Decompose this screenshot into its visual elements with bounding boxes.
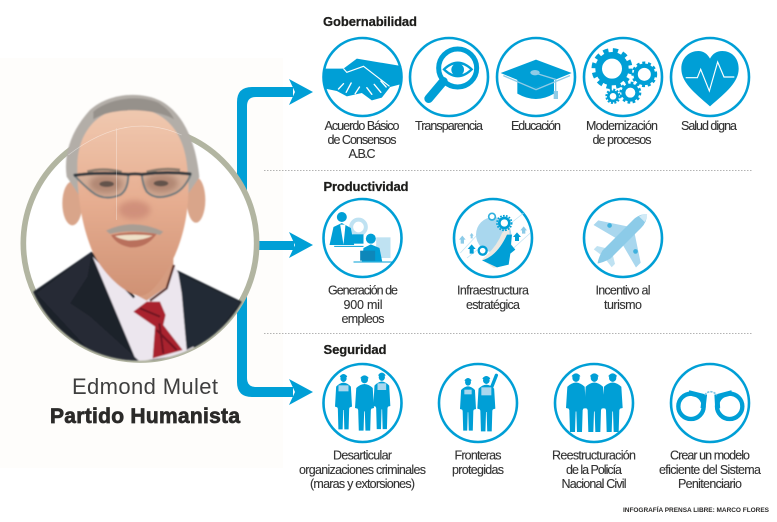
item: Generación de 900 mil empleos: 900 mil [344, 298, 382, 312]
item: Generación de 900 mil empleos [324, 199, 402, 326]
item: Educación: Educación [511, 119, 561, 133]
item: Transparencia [410, 38, 488, 133]
item: Infraestructura estratégica: estratégica [466, 298, 520, 312]
item: Modernización de procesos: Modernización [586, 119, 658, 133]
item: Transparencia: Transparencia [415, 119, 483, 133]
item: Acuerdo Básico de Consensos: de Consensos [328, 133, 396, 147]
item: Desarticular organizaciones criminales: (maras y extorsiones) [310, 477, 415, 491]
nose and mouth [118, 201, 150, 219]
item: Desarticular organizaciones criminales: Desarticular [333, 448, 392, 462]
item: Crear un modelo eficiente del Sistema Penitenciario: eficiente del Sistema [659, 463, 761, 477]
item: Incentivo al turismo [576, 193, 668, 312]
item: Reestructuración de la Policía Nacional Civil: de la Policía [566, 463, 622, 477]
panel: Productividad: Productividad [324, 179, 409, 194]
panel: Gobernabilidad [323, 14, 749, 161]
panel: Seguridad [299, 342, 761, 491]
item: Crear un modelo eficiente del Sistema Penitenciario: Penitenciario [678, 477, 742, 491]
panel: Gobernabilidad: Gobernabilidad [323, 14, 417, 29]
item: Educación [497, 38, 575, 133]
item: Reestructuración de la Policía Nacional Civil [552, 364, 636, 491]
glasses [74, 172, 191, 198]
connector arrows [237, 79, 313, 405]
item: Salud digna [671, 38, 749, 133]
item: Infraestructura estratégica [454, 199, 532, 312]
hair sides [66, 95, 199, 197]
item: Generación de 900 mil empleos: Generación de [328, 284, 398, 298]
item: Generación de 900 mil empleos: empleos [342, 312, 384, 326]
candidate name: Partido Humanista [50, 405, 240, 428]
panel: Productividad [324, 179, 668, 326]
item: Crear un modelo eficiente del Sistema Penitenciario [659, 364, 761, 491]
candidate name: Edmond Mulet [72, 374, 218, 399]
item: Crear un modelo eficiente del Sistema Penitenciario: Crear un modelo [670, 448, 750, 462]
item: Reestructuración de la Policía Nacional Civil: Reestructuración [552, 448, 636, 462]
item: Infraestructura estratégica: Infraestructura [457, 284, 529, 298]
item: Reestructuración de la Policía Nacional Civil: Nacional Civil [562, 477, 626, 491]
item: Fronteras protegidas: protegidas [452, 463, 504, 477]
face [77, 108, 188, 296]
candidate name [50, 374, 240, 428]
item: Acuerdo Básico de Consensos: Acuerdo Básico [324, 119, 400, 133]
item: Salud digna: Salud digna [681, 119, 737, 133]
panel: Seguridad: Seguridad [324, 342, 387, 357]
item: Fronteras protegidas [439, 364, 517, 477]
item: Acuerdo Básico de Consensos [323, 38, 402, 161]
item: Incentivo al turismo: turismo [604, 298, 642, 312]
item: Modernización de procesos: de procesos [592, 133, 652, 147]
item: Desarticular organizaciones criminales: organizaciones criminales [299, 463, 426, 477]
ears [62, 177, 205, 225]
item: Fronteras protegidas: Fronteras [454, 448, 502, 462]
item: Desarticular organizaciones criminales [299, 364, 426, 491]
item: Acuerdo Básico de Consensos: A.B.C [348, 147, 376, 161]
item: Incentivo al turismo: Incentivo al [596, 284, 650, 298]
portrait of Edmond Mulet [23, 95, 257, 362]
eyes and brows [89, 175, 123, 193]
item: Modernización de procesos [584, 38, 662, 147]
credit line: INFOGRAFÍA PRENSA LIBRE: MARCO FLORES [623, 505, 770, 514]
